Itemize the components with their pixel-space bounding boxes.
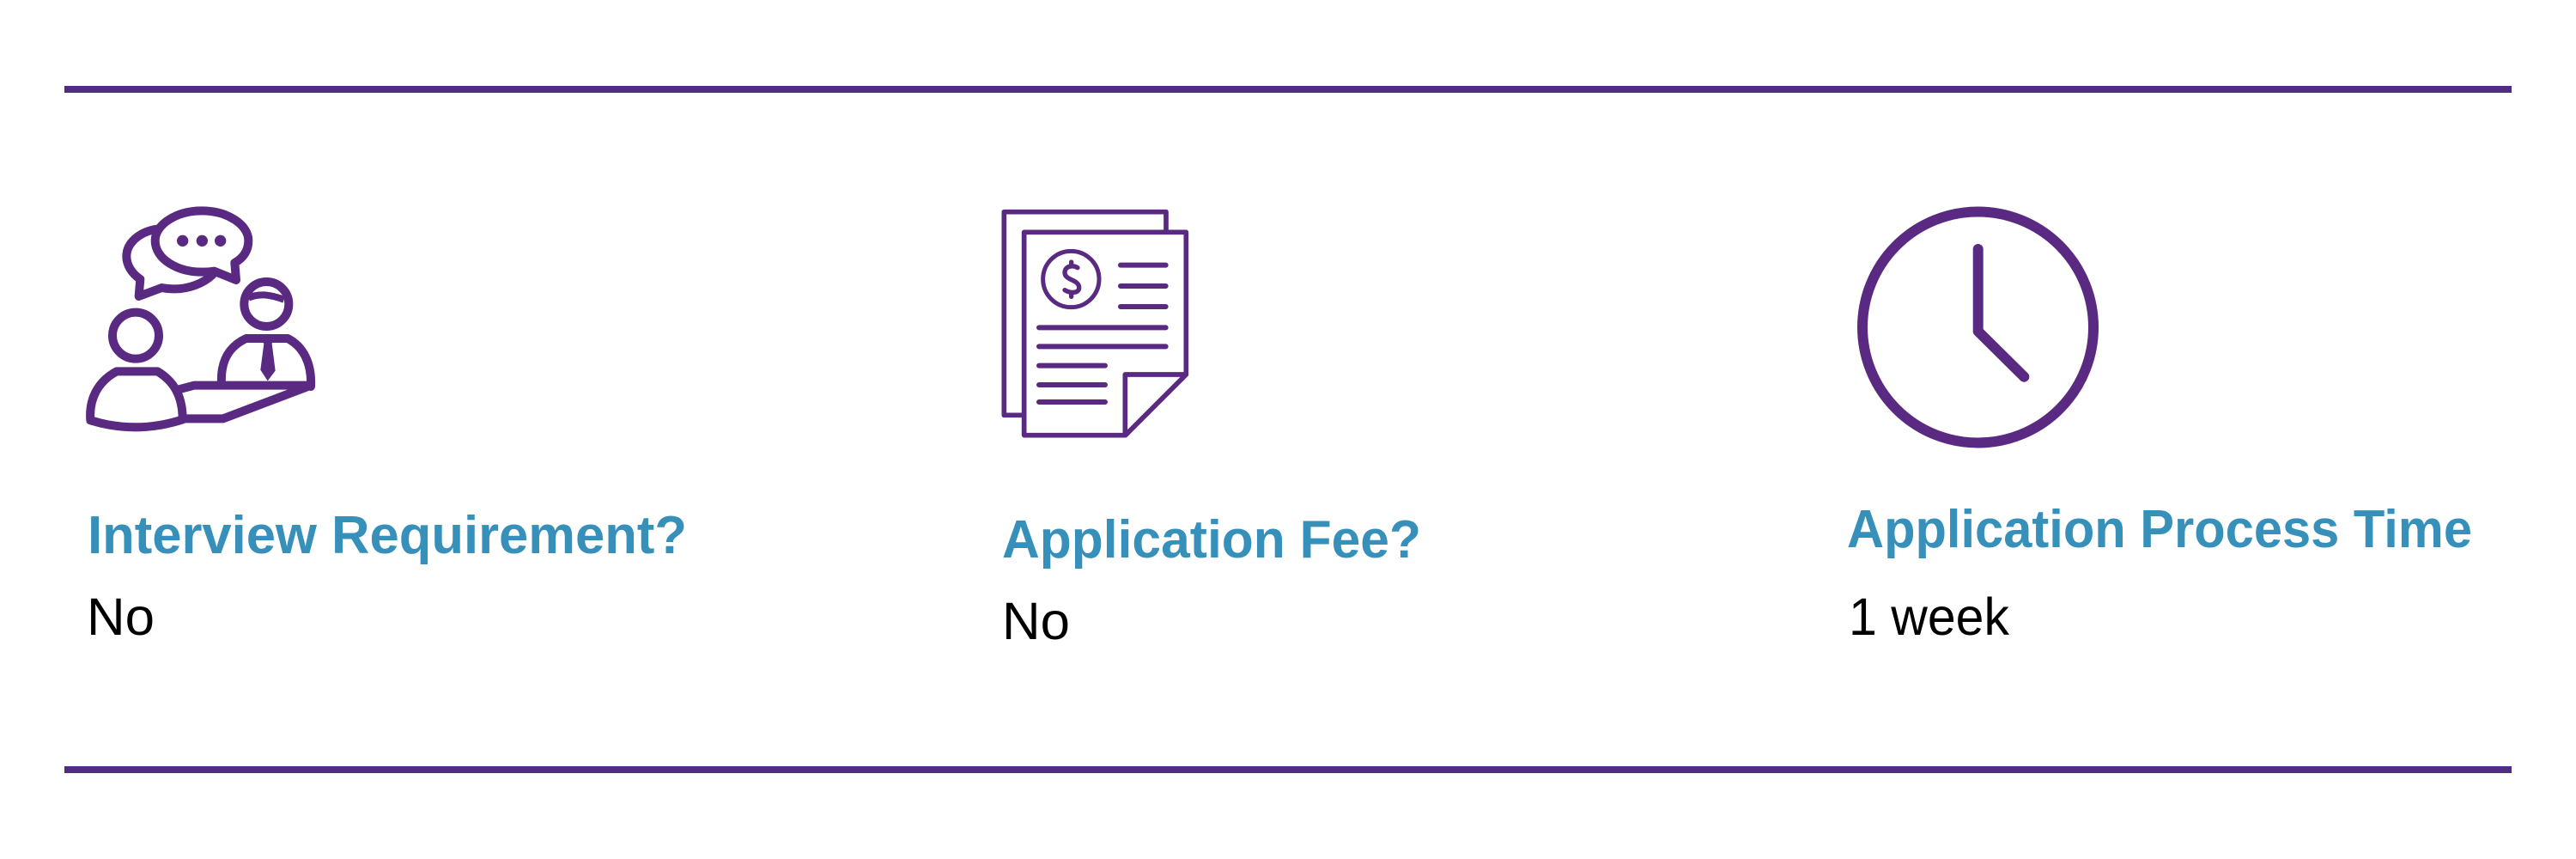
icon: clock (1862, 211, 2093, 443)
icon: invoice document with dollar sign (1004, 212, 1186, 436)
icon: interview with speech bubbles (90, 210, 311, 427)
heading: application fee: Application Fee? (1002, 510, 1421, 570)
panel: application fee (1002, 212, 1421, 650)
panel: application process time (1847, 211, 2472, 646)
heading: application process time: Application Process Time (1847, 500, 2472, 559)
panel: interview requirement (87, 210, 687, 646)
heading: interview requirement: Interview Requirement? (88, 506, 687, 565)
value: interview requirement: No (87, 588, 155, 646)
value: application fee: No (1002, 592, 1070, 650)
value: application process time: 1 week (1849, 588, 2009, 646)
